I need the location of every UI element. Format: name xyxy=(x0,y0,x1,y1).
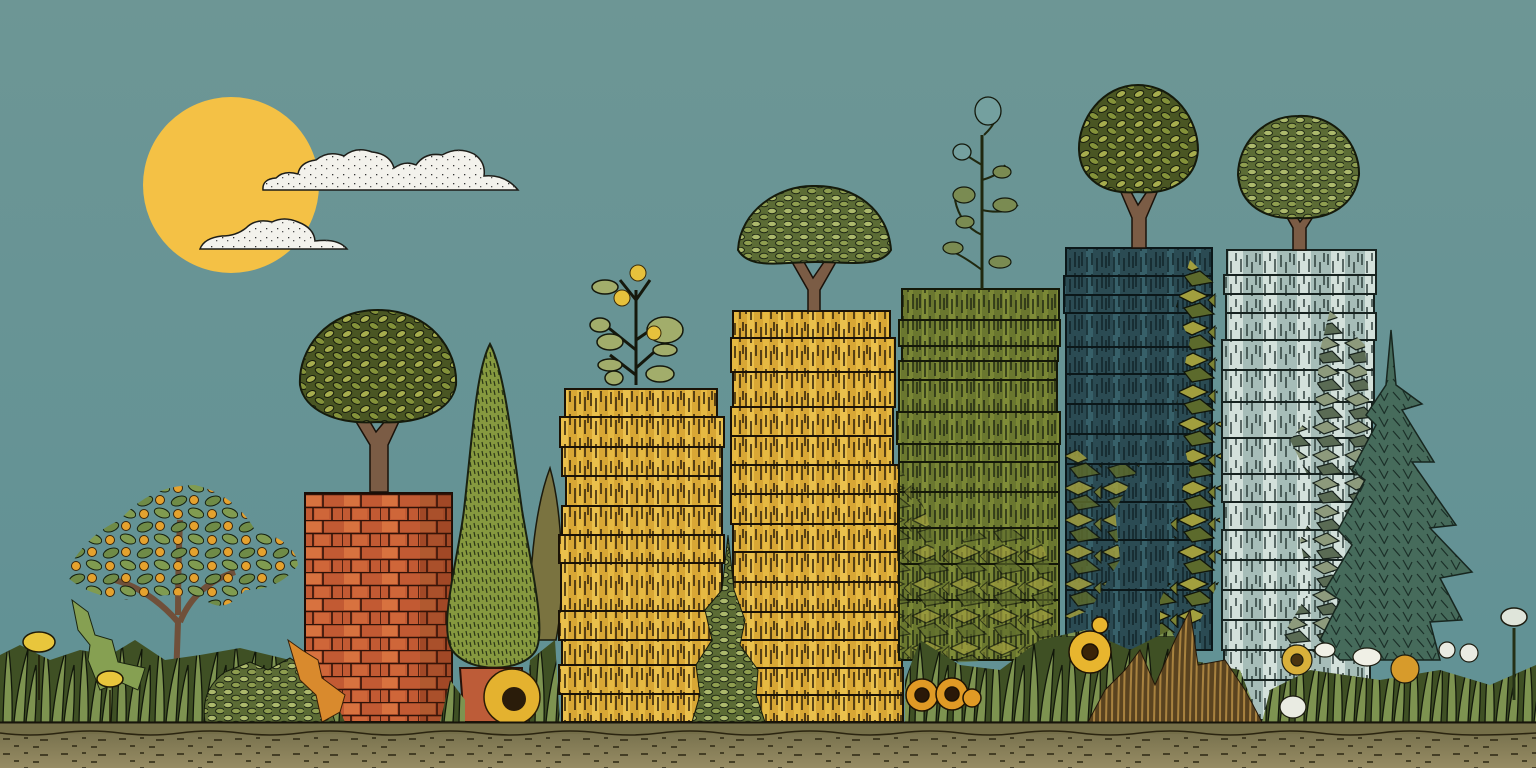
cypress in pot xyxy=(447,344,539,722)
tall white flower at right xyxy=(1501,608,1527,700)
tree on brick stack xyxy=(300,310,456,492)
orange sunflowers xyxy=(906,678,981,711)
icon: yellow disc flowers xyxy=(23,632,123,722)
large yellow sunflower xyxy=(1069,617,1111,673)
green stack xyxy=(897,289,1060,660)
soil ground xyxy=(0,722,1536,768)
plant on yellow stack 1 xyxy=(590,265,683,385)
garden foliage band xyxy=(0,630,1536,722)
lower cloud xyxy=(200,219,347,249)
pale stack xyxy=(1222,250,1376,720)
tree on pale stack xyxy=(1238,116,1359,250)
dark blue stack xyxy=(1064,248,1212,650)
tree on yellow stack 2 xyxy=(738,186,891,311)
climbing leaves on green stack xyxy=(900,470,1053,662)
white and yellow flowers xyxy=(1280,642,1478,718)
vine on dark blue stack xyxy=(1160,260,1260,640)
vine on pale stack xyxy=(1280,310,1375,660)
climbing plant on green stack xyxy=(943,97,1018,289)
flowering tree xyxy=(65,485,298,680)
shrub with yellow-green leaves xyxy=(204,658,335,722)
yellow stack 1 xyxy=(559,389,724,722)
lower-left vine on dark blue stack xyxy=(1065,440,1140,620)
icon: sun xyxy=(143,97,319,273)
upper cloud xyxy=(263,150,518,190)
fir tree xyxy=(1320,330,1472,660)
brick stack xyxy=(305,493,452,722)
sunflower at pot xyxy=(484,669,540,725)
shrub at yellow stacks xyxy=(692,535,765,722)
orange autumn shrub xyxy=(288,640,345,722)
brown grass tufts xyxy=(1088,610,1262,722)
left leafy plant xyxy=(72,600,145,690)
brown cypress behind xyxy=(530,468,562,640)
yellow stack 2 xyxy=(731,311,903,722)
tree on dark blue stack xyxy=(1079,85,1198,248)
